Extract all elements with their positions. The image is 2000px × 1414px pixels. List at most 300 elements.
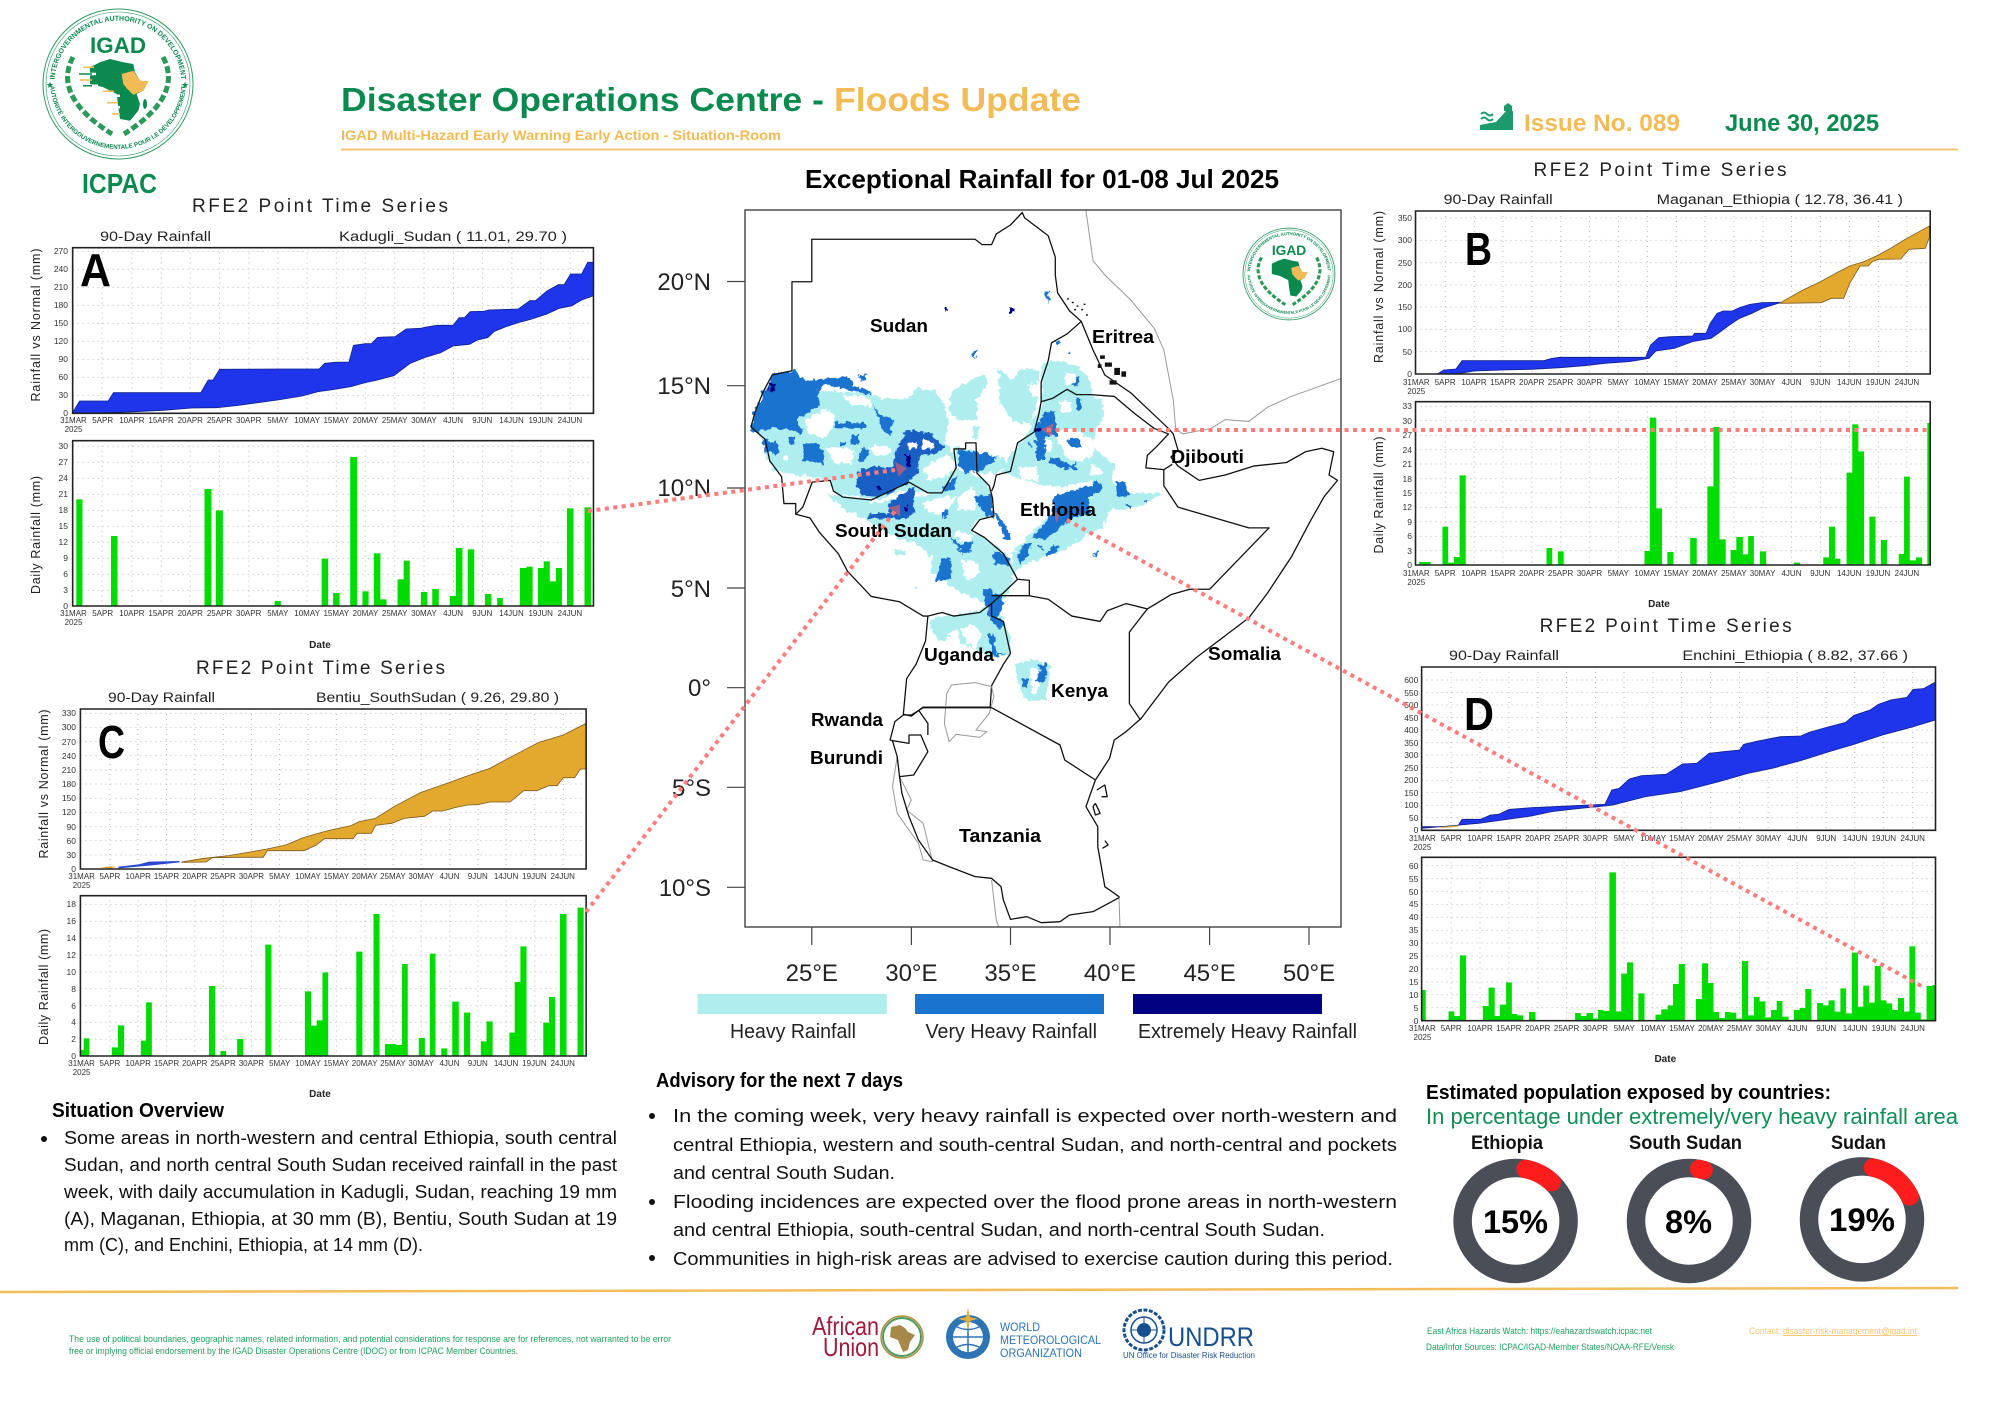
donut: South Sudan: South Sudan	[1629, 1133, 1742, 1154]
small IGAD logo on map: INTERGOVERNMENTAL AUTHORITY ON DEVELOPMENT	[1247, 232, 1331, 271]
chart C: Bentiu: 25APR	[210, 872, 236, 881]
chart D: Enchini: 20APR	[1525, 834, 1551, 843]
chart D: Enchini: 4JUN	[1787, 834, 1808, 843]
chart C: Bentiu: 14JUN	[494, 872, 519, 881]
chart C: Bentiu: 240	[62, 751, 76, 761]
chart B: Maganan: 300	[1398, 235, 1412, 245]
country labels: Ethiopia	[1020, 500, 1097, 520]
chart D: Enchini: 4JUN	[1787, 1024, 1808, 1033]
chart D: Enchini: 10MAY	[1640, 1024, 1667, 1033]
rainfall areas	[750, 291, 1162, 700]
chart C: Bentiu: 30APR	[239, 872, 264, 881]
chart A: Kadugli: Date	[309, 640, 331, 651]
chart B: Maganan: 24	[1403, 445, 1412, 455]
chart D: Enchini: 55	[1409, 874, 1419, 884]
footer sources: East Africa Hazards Watch: https://eahazardswatch.icpac.net	[1427, 1326, 1652, 1337]
chart D: Enchini: Date	[1654, 1054, 1677, 1065]
chart D: Enchini: 2025	[1414, 843, 1432, 852]
chart A: Kadugli: 120	[54, 336, 68, 346]
chart A: Kadugli: 20APR	[178, 416, 203, 425]
chart D: Enchini: 40	[1409, 912, 1419, 922]
chart A: Kadugli: 5APR	[92, 416, 113, 425]
chart B: Maganan: 10APR	[1461, 569, 1487, 578]
chart D: Enchini: 30MAY	[1756, 834, 1782, 843]
logo: IGAD emblem	[42, 8, 194, 160]
chart A: Kadugli: 15MAY	[323, 609, 350, 618]
chart A: Kadugli: 25MAY	[382, 609, 408, 618]
longitude labels: 50°E	[1283, 960, 1335, 987]
chart C: Bentiu: 6	[71, 1001, 76, 1011]
panel: advisory: and central Ethiopia, south-central Sudan, and north-central South Sudan.	[673, 1220, 1325, 1240]
chart B: Maganan: 10MAY	[1634, 378, 1661, 387]
chart D: Enchini: 31MAR	[1409, 1024, 1436, 1033]
panel: situation overview: Some areas in north-western and central Ethiopia, south central	[64, 1128, 617, 1148]
chart B: Maganan: 24JUN	[1895, 378, 1919, 387]
chart A: Kadugli: 10MAY	[294, 609, 321, 618]
chart C: Bentiu: 8	[71, 984, 76, 994]
chart A: Kadugli: 15	[59, 521, 68, 531]
chart C: Bentiu: 5APR	[99, 872, 121, 881]
chart B: Maganan: 19JUN	[1866, 378, 1890, 387]
chart A: Kadugli: 90	[59, 354, 68, 364]
chart C: Bentiu: 0	[71, 1051, 76, 1061]
chart C: Bentiu: Rainfall vs Normal (mm)	[37, 710, 51, 858]
chart C: Bentiu: 14JUN	[494, 1059, 519, 1068]
chart B: Maganan: Rainfall vs Normal (mm)	[1372, 211, 1386, 363]
chart C: Bentiu: 18	[67, 899, 76, 909]
chart B: Maganan: 0	[1407, 560, 1412, 570]
chart D: Enchini: 9JUN	[1816, 834, 1836, 843]
chart D: Enchini: 450	[1404, 713, 1419, 723]
latitude labels: 0°	[688, 675, 711, 702]
chart D: Enchini: 25	[1409, 951, 1419, 961]
logo: IGAD emblem: AUTORITÉ INTERGOUVERNEMENTALE POUR LE DÉVELOPPEMENT	[50, 86, 186, 149]
panel: exposed population: Estimated population exposed by countries:	[1426, 1082, 1831, 1104]
chart A: Kadugli: 24JUN	[558, 416, 582, 425]
logo: African Union: Union	[823, 1332, 879, 1362]
chart D: Enchini: 30APR	[1583, 1024, 1608, 1033]
latitude labels: 10°S	[659, 875, 711, 902]
connector: point C to chart C	[586, 511, 895, 912]
chart D: Enchini: 10MAY	[1640, 834, 1667, 843]
chart D: Enchini: 24JUN	[1900, 834, 1925, 843]
longitude labels: 35°E	[984, 960, 1037, 987]
chart D: Enchini: 2025	[1414, 1033, 1432, 1042]
logo: IGAD emblem: ★	[181, 80, 189, 90]
chart C: Bentiu: 210	[62, 765, 76, 775]
issue number: Issue No. 089	[1524, 110, 1680, 137]
connector: point A to chart A	[588, 470, 895, 511]
chart A: Kadugli: 10MAY	[294, 416, 321, 425]
chart D: Enchini: 24JUN	[1900, 1024, 1925, 1033]
chart B: Maganan: 31MAR	[1403, 378, 1430, 387]
donut: Ethiopia: Ethiopia	[1471, 1133, 1543, 1154]
chart D: Enchini: 20	[1409, 964, 1419, 974]
chart D: Enchini: RFE2 Point Time Series	[1540, 616, 1792, 637]
chart B: Maganan: 10APR	[1461, 378, 1487, 387]
map title: Exceptional Rainfall for 01-08 Jul 2025	[805, 164, 1279, 194]
chart A: Kadugli: 5MAY	[267, 416, 289, 425]
chart A: Kadugli: 30MAY	[411, 416, 437, 425]
chart A: Kadugli: 240	[54, 264, 68, 274]
chart D: Enchini: 200	[1404, 775, 1419, 785]
chart C: Bentiu: Date	[309, 1089, 331, 1100]
chart B: Maganan: 27	[1403, 430, 1412, 440]
chart C: Bentiu: 2025	[73, 1068, 91, 1077]
chart B: Maganan: 90-Day Rainfall	[1444, 192, 1553, 207]
chart A: Kadugli: Daily Rainfall (mm)	[29, 476, 43, 594]
chart C: Bentiu: 15MAY	[323, 1059, 350, 1068]
chart D: Enchini: 30APR	[1583, 834, 1608, 843]
country labels: Eritrea	[1092, 327, 1155, 347]
chart D: Enchini: 20APR	[1525, 1024, 1551, 1033]
chart C: Bentiu: 5MAY	[269, 1059, 291, 1068]
logo: WMO: ORGANIZATION	[1000, 1346, 1082, 1360]
chart C: Bentiu: 5MAY	[269, 872, 291, 881]
chart B: Maganan: 9	[1407, 517, 1412, 527]
chart A: Kadugli: 10APR	[119, 609, 145, 618]
chart C: Bentiu: RFE2 Point Time Series	[196, 658, 445, 679]
donut: South Sudan	[1629, 1133, 1742, 1274]
chart C: Bentiu: 270	[62, 737, 76, 747]
country labels: Tanzania	[959, 826, 1042, 846]
chart C: Bentiu: 9JUN	[468, 872, 488, 881]
country borders north	[751, 211, 1341, 720]
chart A: Kadugli: 210	[54, 282, 68, 292]
longitude labels: 40°E	[1084, 960, 1136, 987]
chart B: Maganan: 20MAY	[1692, 569, 1718, 578]
chart A: Kadugli: 30MAY	[411, 609, 437, 618]
chart A: Kadugli: 25APR	[207, 609, 232, 618]
chart B: Maganan: 4JUN	[1781, 378, 1802, 387]
chart D: Enchini: 15MAY	[1669, 834, 1695, 843]
footer sources	[1426, 1326, 1674, 1353]
panel: advisory	[649, 1070, 1397, 1269]
chart B: Maganan: 100	[1398, 324, 1412, 334]
chart D: Enchini: 500	[1404, 700, 1419, 710]
donut: Ethiopia	[1463, 1133, 1569, 1274]
chart B: Maganan: 20MAY	[1692, 378, 1718, 387]
chart D: Enchini: 150	[1404, 788, 1419, 798]
chart A: Kadugli: 20MAY	[353, 609, 379, 618]
chart A: Kadugli: 20MAY	[353, 416, 379, 425]
map legend: Extremely Heavy Rainfall	[1138, 1021, 1357, 1043]
chart C: Bentiu: 24JUN	[550, 872, 575, 881]
country labels	[810, 316, 1282, 846]
chart B: Maganan: 250	[1398, 258, 1412, 268]
country labels: Djibouti	[1171, 447, 1244, 467]
chart D: Enchini: 400	[1404, 725, 1419, 735]
chart A: Kadugli: Rainfall vs Normal (mm)	[29, 248, 43, 402]
chart C: Bentiu: 20MAY	[352, 1059, 378, 1068]
chart A: Kadugli: 9JUN	[472, 609, 493, 618]
chart B: Maganan: B	[1465, 223, 1492, 275]
country labels: Burundi	[810, 748, 883, 768]
chart C: Bentiu: 15APR	[154, 872, 179, 881]
country labels: South Sudan	[835, 521, 952, 541]
chart B: Maganan: 15	[1403, 488, 1412, 498]
latitude labels: 5°N	[671, 576, 711, 603]
chart C: Bentiu: 300	[62, 722, 76, 732]
chart C: Bentiu: 120	[62, 807, 76, 817]
chart C: Bentiu: 9JUN	[468, 1059, 488, 1068]
chart A: Kadugli: 5MAY	[267, 609, 289, 618]
chart A: Kadugli: 21	[59, 489, 68, 499]
chart B: Maganan: 2025	[1407, 387, 1426, 396]
chart A: Kadugli: 2025	[65, 425, 83, 434]
donut: South Sudan: 8%	[1665, 1204, 1712, 1240]
chart A: Kadugli: 5APR	[92, 609, 113, 618]
chart B: Maganan: 24JUN	[1895, 569, 1919, 578]
donut: Sudan	[1809, 1133, 1915, 1272]
chart C: Bentiu: 31MAR	[68, 872, 95, 881]
footer contact: Contact: disaster-risk-management@igad.int	[1749, 1326, 1917, 1337]
chart C: Bentiu: 15MAY	[323, 872, 350, 881]
chart A: Kadugli: 14JUN	[499, 416, 524, 425]
chart D: Enchini: 25APR	[1554, 1024, 1579, 1033]
chart C: Bentiu: 12	[67, 950, 76, 960]
chart D: Enchini: 25MAY	[1727, 834, 1753, 843]
chart A: Kadugli: 19JUN	[528, 609, 553, 618]
footer sources: Data/Infor Sources: ICPAC/IGAD-Member States/NOAA-RFE/Verisk	[1426, 1342, 1674, 1353]
chart C: Bentiu: 0	[71, 864, 76, 874]
chart D: Enchini: Enchini_Ethiopia ( 8.82, 37.66 )	[1682, 648, 1908, 663]
chart A: Kadugli: 10APR	[119, 416, 145, 425]
chart D: Enchini	[1404, 616, 1936, 1065]
chart C: Bentiu: 30	[67, 850, 76, 860]
chart B: Maganan: 30MAY	[1750, 378, 1776, 387]
chart C: Bentiu: 15APR	[154, 1059, 179, 1068]
chart C: Bentiu: 90-Day Rainfall	[108, 690, 215, 705]
logo: WMO: METEOROLOGICAL	[1000, 1333, 1101, 1347]
logo: UNDRR	[1123, 1310, 1255, 1360]
chart D: Enchini: 350	[1404, 738, 1419, 748]
chart A: Kadugli: Kadugli_Sudan ( 11.01, 29.70 )	[339, 229, 567, 244]
latitude labels: 10°N	[657, 475, 711, 502]
chart B: Maganan: 5APR	[1435, 569, 1456, 578]
chart B: Maganan: 25APR	[1548, 378, 1573, 387]
chart B: Maganan: 200	[1398, 280, 1412, 290]
chart A: Kadugli: 2025	[65, 618, 83, 627]
logo: IGAD emblem: IGAD	[90, 33, 146, 58]
country labels: Kenya	[1051, 681, 1109, 701]
chart A: Kadugli: 9JUN	[472, 416, 493, 425]
chart C: Bentiu: 31MAR	[68, 1059, 95, 1068]
chart C: Bentiu: 2025	[73, 881, 91, 890]
subtitle: IGAD Multi-Hazard Early Warning Early Action - Situation-Room	[341, 127, 781, 143]
latitude labels: 20°N	[657, 269, 711, 296]
chart A: Kadugli: 6	[63, 569, 68, 579]
chart B: Maganan: 5MAY	[1608, 378, 1630, 387]
chart A: Kadugli: 180	[54, 300, 68, 310]
chart B: Maganan: 4JUN	[1781, 569, 1802, 578]
chart C: Bentiu: Bentiu_SouthSudan ( 9.26, 29.80 )	[316, 690, 559, 705]
chart A: Kadugli: A	[80, 244, 111, 296]
chart D: Enchini: 90-Day Rainfall	[1449, 648, 1559, 663]
chart A: Kadugli: 30APR	[236, 609, 262, 618]
donut: Ethiopia: 15%	[1483, 1204, 1548, 1240]
chart D: Enchini: 25APR	[1554, 834, 1579, 843]
chart A: Kadugli: 90-Day Rainfall	[100, 229, 211, 244]
chart A: Kadugli: 4JUN	[443, 609, 463, 618]
panel: situation overview: mm (C), and Enchini, Ethiopia, at 14 mm (D).	[64, 1235, 423, 1255]
chart C: Bentiu: 10MAY	[295, 1059, 321, 1068]
logo: WMO: WORLD	[1000, 1320, 1040, 1334]
chart C: Bentiu: 4JUN	[439, 1059, 460, 1068]
chart B: Maganan: 5MAY	[1608, 569, 1630, 578]
chart B: Maganan: 15MAY	[1663, 569, 1689, 578]
chart B: Maganan: 12	[1403, 502, 1412, 512]
chart A: Kadugli	[29, 196, 593, 651]
chart D: Enchini: 5APR	[1441, 834, 1462, 843]
chart D: Enchini: 250	[1404, 763, 1419, 773]
chart B: Maganan: 5APR	[1435, 378, 1456, 387]
chart B: Maganan: 6	[1407, 531, 1412, 541]
chart D: Enchini: 0	[1414, 1016, 1419, 1026]
map legend: Heavy Rainfall	[730, 1021, 856, 1043]
chart A: Kadugli: RFE2 Point Time Series	[192, 196, 448, 217]
chart C: Bentiu: 10MAY	[295, 872, 321, 881]
chart B: Maganan: 10MAY	[1634, 569, 1661, 578]
panel: situation overview: Situation Overview	[52, 1100, 224, 1122]
chart D: Enchini: 20MAY	[1698, 834, 1724, 843]
chart D: Enchini: 300	[1404, 750, 1419, 760]
chart B: Maganan: 19JUN	[1866, 569, 1890, 578]
chart D: Enchini: 5	[1414, 1003, 1419, 1013]
chart D: Enchini: 0	[1414, 825, 1419, 835]
chart D: Enchini: 60	[1409, 861, 1419, 871]
chart A: Kadugli: 12	[59, 537, 68, 547]
icon: flood issue marker	[1480, 103, 1513, 130]
chart C: Bentiu: 16	[67, 916, 76, 926]
longitude labels: 25°E	[786, 960, 838, 987]
chart C: Bentiu	[37, 658, 586, 1100]
chart A: Kadugli: 24JUN	[558, 609, 582, 618]
chart C: Bentiu: 5APR	[99, 1059, 121, 1068]
panel: situation overview: Sudan, and north central South Sudan received rainfall in the past	[64, 1155, 617, 1175]
chart A: Kadugli: 14JUN	[499, 609, 524, 618]
panel: exposed population: In percentage under extremely/very heavy rainfall area	[1426, 1104, 1959, 1129]
chart D: Enchini: 30	[1409, 938, 1419, 948]
chart B: Maganan: 15APR	[1490, 378, 1516, 387]
chart C: Bentiu: Daily Rainfall (mm)	[37, 929, 51, 1045]
chart C: Bentiu: 20APR	[182, 872, 208, 881]
chart B: Maganan: 15APR	[1490, 569, 1516, 578]
logo: African Union: African	[812, 1311, 879, 1341]
map frame	[745, 210, 1341, 927]
chart D: Enchini: 35	[1409, 925, 1419, 935]
chart B: Maganan: 20APR	[1519, 378, 1545, 387]
chart C: Bentiu: 2	[71, 1034, 76, 1044]
chart C: Bentiu: 14	[67, 933, 76, 943]
chart B: Maganan: RFE2 Point Time Series	[1534, 160, 1786, 181]
chart C: Bentiu: 150	[62, 793, 76, 803]
date: June 30, 2025	[1725, 110, 1879, 137]
chart D: Enchini: 100	[1404, 800, 1419, 810]
chart C: Bentiu: 330	[62, 708, 76, 718]
chart D: Enchini: 19JUN	[1872, 1024, 1896, 1033]
chart B: Maganan: 14JUN	[1837, 378, 1862, 387]
latitude labels: 5°S	[672, 775, 711, 802]
chart C: Bentiu: 60	[67, 836, 76, 846]
chart C: Bentiu: 20APR	[182, 1059, 208, 1068]
chart A: Kadugli: 150	[54, 318, 68, 328]
chart B: Maganan: Maganan_Ethiopia ( 12.78, 36.41 )	[1657, 192, 1903, 207]
chart D: Enchini: 31MAR	[1409, 834, 1436, 843]
footer disclaimer	[69, 1334, 671, 1357]
chart B: Maganan: 20APR	[1519, 569, 1545, 578]
chart A: Kadugli: 4JUN	[443, 416, 463, 425]
chart A: Kadugli: 60	[59, 372, 68, 382]
chart C: Bentiu: 20MAY	[352, 872, 378, 881]
chart C: Bentiu: 25MAY	[380, 1059, 406, 1068]
chart B: Maganan: 30APR	[1577, 378, 1602, 387]
longitude labels: 30°E	[885, 960, 938, 987]
chart B: Maganan: 25MAY	[1721, 378, 1747, 387]
chart A: Kadugli: 18	[59, 505, 68, 515]
donut: Sudan: Sudan	[1831, 1133, 1886, 1154]
chart A: Kadugli: 24	[59, 473, 68, 483]
chart A: Kadugli: 31MAR	[60, 609, 87, 618]
chart C: Bentiu: 24JUN	[550, 1059, 575, 1068]
chart D: Enchini: 5MAY	[1614, 1024, 1636, 1033]
donut: Sudan: 19%	[1829, 1202, 1895, 1238]
chart A: Kadugli: 25MAY	[382, 416, 408, 425]
chart B: Maganan: 30APR	[1577, 569, 1602, 578]
chart A: Kadugli: 30APR	[236, 416, 262, 425]
chart A: Kadugli: 15MAY	[323, 416, 350, 425]
label: ICPAC: ICPAC	[82, 168, 157, 199]
chart D: Enchini: 20MAY	[1698, 1024, 1724, 1033]
chart D: Enchini: 14JUN	[1843, 834, 1867, 843]
chart B: Maganan: 30	[1403, 416, 1412, 426]
chart B: Maganan: 15MAY	[1663, 378, 1689, 387]
chart D: Enchini: 50	[1409, 887, 1419, 897]
chart A: Kadugli: 0	[63, 408, 68, 418]
chart A: Kadugli: 30	[59, 390, 68, 400]
chart C: Bentiu: 19JUN	[522, 872, 547, 881]
chart C: Bentiu: C	[98, 716, 125, 768]
chart C: Bentiu: 30APR	[239, 1059, 264, 1068]
chart A: Kadugli: 15APR	[148, 416, 174, 425]
panel: situation overview: (A), Maganan, Ethiopia, at 30 mm (B), Bentiu, South Sudan at 19	[64, 1209, 617, 1229]
chart D: Enchini: 9JUN	[1816, 1024, 1836, 1033]
chart B: Maganan: 50	[1403, 347, 1412, 357]
country labels: Rwanda	[811, 710, 884, 730]
chart D: Enchini: 10APR	[1467, 1024, 1493, 1033]
chart C: Bentiu: 25APR	[210, 1059, 236, 1068]
chart D: Enchini: D	[1464, 688, 1494, 740]
country labels: Sudan	[870, 316, 928, 336]
country labels: Uganda	[924, 645, 995, 665]
chart B: Maganan: 9JUN	[1810, 569, 1831, 578]
panel: exposed population	[1426, 1082, 1959, 1274]
chart B: Maganan: 150	[1398, 302, 1412, 312]
chart A: Kadugli: 19JUN	[528, 416, 553, 425]
small IGAD logo on map: AUTORITÉ INTERGOUVERNEMENTALE POUR LE DÉVELOPPEMENT	[1247, 274, 1330, 314]
title: Disaster Operations Centre -	[341, 81, 824, 118]
panel: advisory: and central South Sudan.	[673, 1163, 895, 1183]
chart D: Enchini: 10APR	[1467, 834, 1493, 843]
chart A: Kadugli: 27	[59, 457, 68, 467]
chart C: Bentiu: 25MAY	[380, 872, 406, 881]
logo: UNDRR: UNDRR	[1168, 1322, 1254, 1352]
chart B: Maganan: 3	[1407, 546, 1412, 556]
panel: advisory: Flooding incidences are expected over the flood prone areas in north-western	[673, 1192, 1397, 1212]
logo: UNDRR: UN Office for Disaster Risk Reduction	[1123, 1350, 1255, 1360]
chart C: Bentiu: 10	[67, 967, 76, 977]
panel: advisory: In the coming week, very heavy rainfall is expected over north-western and	[673, 1106, 1397, 1126]
